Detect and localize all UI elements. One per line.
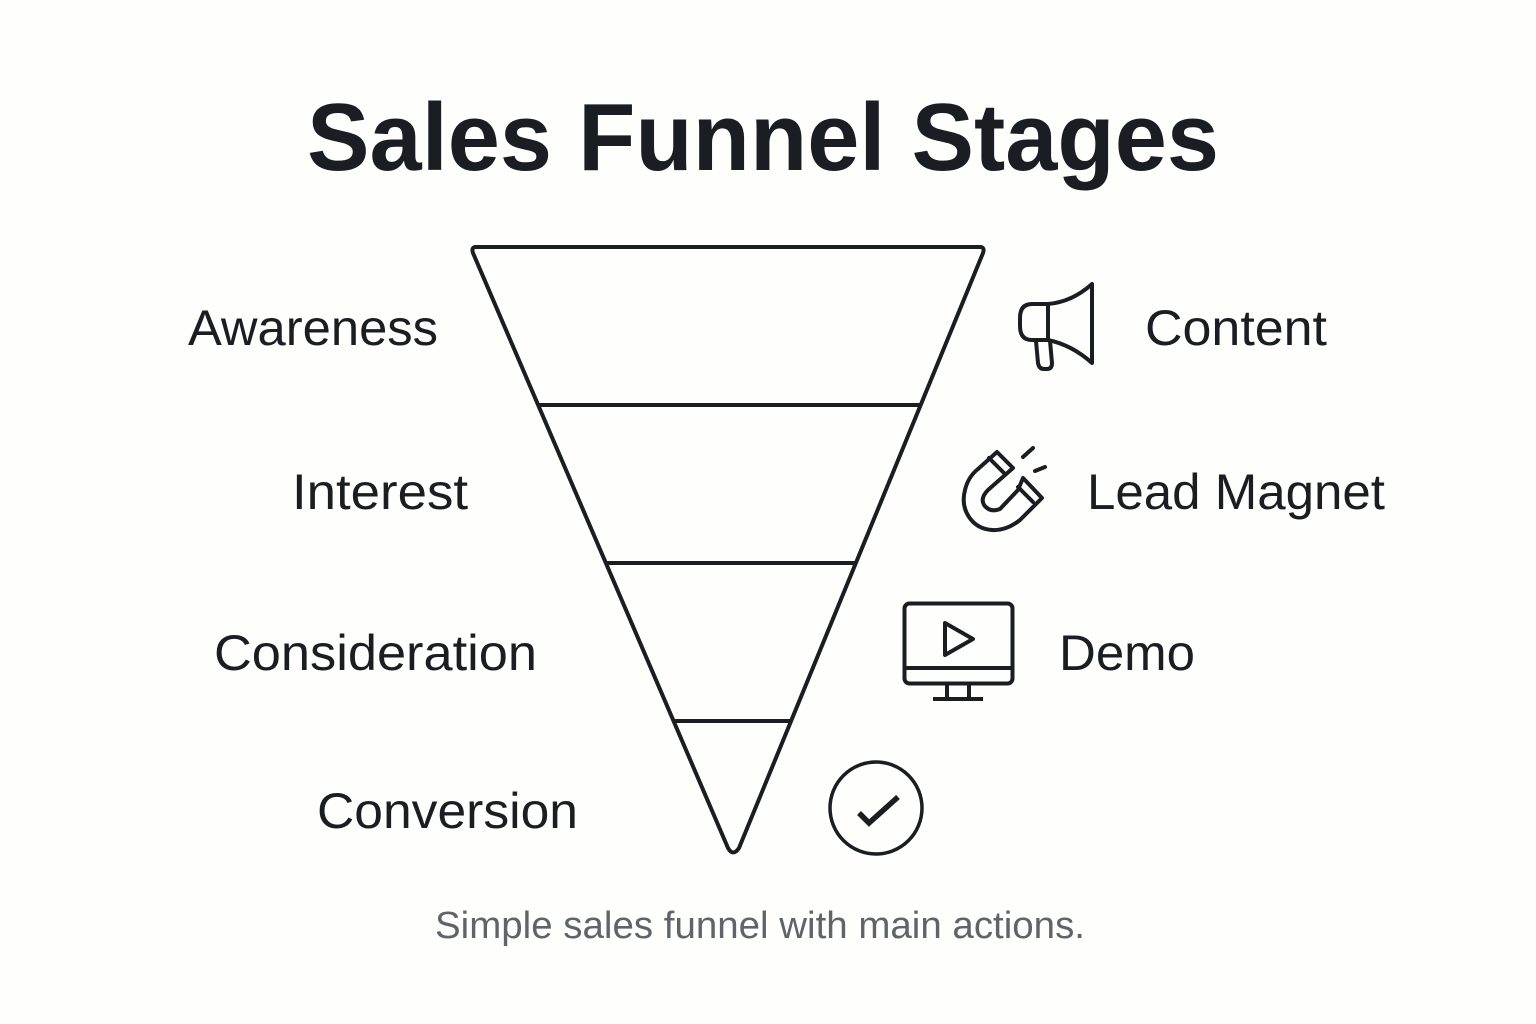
label: Lead Magnet: Lead Magnet xyxy=(1087,464,1385,520)
label: Conversion: Conversion xyxy=(317,783,578,839)
funnel diagram xyxy=(472,247,984,852)
icon: megaphone xyxy=(1020,284,1092,369)
divider: awareness / interest xyxy=(539,403,920,407)
title: Sales Funnel Stages xyxy=(307,84,1219,191)
divider: consideration / conversion xyxy=(674,719,791,723)
label: Consideration: Consideration xyxy=(214,625,537,681)
caption: Simple sales funnel with main actions. xyxy=(435,905,1085,947)
icon: magnet xyxy=(964,448,1045,530)
funnel outline xyxy=(472,247,984,852)
label: Awareness: Awareness xyxy=(188,300,438,356)
label: Demo: Demo xyxy=(1059,625,1195,681)
icon: check mark in circle xyxy=(830,762,922,854)
label: Content: Content xyxy=(1145,300,1327,356)
divider: interest / consideration xyxy=(606,561,857,565)
label: Interest: Interest xyxy=(292,464,468,520)
icon: monitor with play button xyxy=(904,604,1013,699)
